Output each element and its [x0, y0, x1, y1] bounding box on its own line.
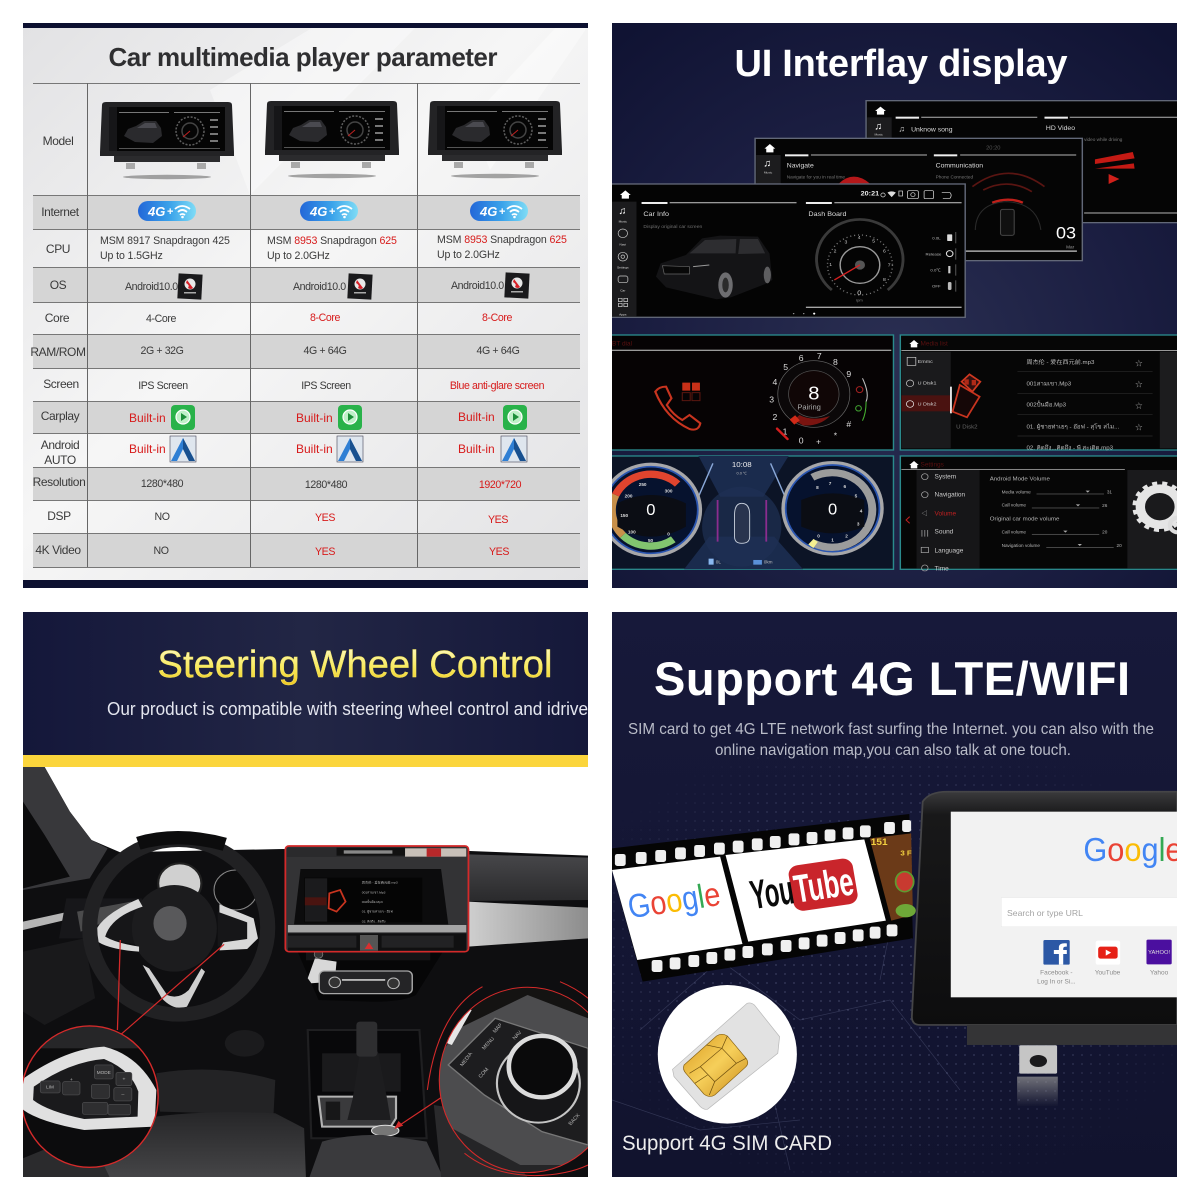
- gauge: tachometer: 5: [855, 493, 858, 498]
- CPU row: Up to 1.5GHz: [100, 250, 163, 262]
- row labels: CPU: [46, 242, 70, 256]
- panel: steering wheel control: [21, 612, 618, 1177]
- gauge: tachometer: 6: [844, 484, 847, 489]
- core row: 8-Core: [310, 312, 340, 324]
- stacked UI screens: [611, 101, 1183, 317]
- screen: navigate and communication: Music: [764, 170, 773, 174]
- gauge: speed: 300: [665, 488, 673, 493]
- screen: car info and dash board: Apps: [619, 312, 627, 316]
- screen: navigate and communication: 20:20: [986, 145, 1001, 151]
- OS row: Android10.0: [451, 280, 504, 292]
- DSP row: YES: [488, 514, 508, 526]
- screen: car info and dash board: Car Info: [643, 211, 669, 218]
- screen: media list: 001สามเขา.Mp3: [1026, 381, 1072, 387]
- DSP row: YES: [315, 512, 335, 524]
- rpm gauge: 0: [857, 290, 861, 297]
- heading: support title: Support 4G LTE/WIFI: [654, 652, 1130, 705]
- internet badges: 4G: [309, 204, 327, 219]
- gauge: tachometer: 8: [816, 485, 819, 490]
- screen: BT dial: Pairing: [797, 403, 821, 411]
- screen: instrument cluster: 10:08: [732, 460, 752, 469]
- screen: settings: Call volume: [1002, 503, 1027, 508]
- carplay row: [129, 405, 527, 430]
- RAM row: 4G + 64G: [476, 345, 520, 357]
- gauge: tachometer: 1: [831, 537, 834, 542]
- gauge: speed: 250: [639, 482, 647, 487]
- shortcut: YouTube: YouTube: [1095, 970, 1121, 977]
- callout arrows: [117, 940, 441, 1128]
- screen: media list: Media list: [921, 341, 948, 348]
- rpm gauge: 5: [872, 239, 875, 245]
- gauge: tachometer: 0: [817, 534, 820, 539]
- gauge: tachometer: 7: [829, 481, 832, 486]
- screen: car info and dash board: Car: [620, 289, 625, 293]
- gauge: tachometer: [781, 461, 884, 556]
- gauge: speed: 150: [620, 513, 629, 518]
- screen: settings: 20: [1117, 543, 1122, 548]
- shortcut: Facebook: Log In or Si...: [1037, 979, 1076, 985]
- screen: instrument cluster: [600, 456, 893, 569]
- zoom box: head unit screen: 001สามเขา.Mp3: [362, 890, 386, 894]
- screen: BT dial: +: [816, 437, 821, 446]
- rpm gauge: 4: [858, 235, 861, 241]
- CPU row: [100, 234, 567, 262]
- screen: car info and dash board: Display original car screen: [643, 224, 703, 230]
- screen: car info and dash board: Navi: [620, 242, 626, 246]
- search bar: Search or type URL: [1007, 908, 1083, 918]
- caption: SIM card: Support 4G SIM CARD: [622, 1132, 832, 1155]
- screen row: Blue anti-glare screen: [450, 380, 545, 392]
- callout circle: idrive knob: MAP: [492, 1022, 505, 1035]
- screen: navigate and communication: Navigate: [787, 163, 814, 170]
- screen: BT dial: 9: [846, 369, 852, 379]
- callout circle: idrive knob: BACK: [568, 1112, 582, 1127]
- core row: [146, 314, 512, 322]
- shortcut: Yahoo: YAHOO!: [1148, 950, 1171, 956]
- vehicle status list: Release: [926, 252, 942, 257]
- screen: settings: Settings: [921, 462, 944, 468]
- callout circle: idrive knob: MENU: [481, 1036, 496, 1051]
- screen: BT dial: 3: [769, 395, 774, 405]
- resolution row: 1920*720: [479, 479, 522, 491]
- film logo: YouTube: Tube: [791, 859, 857, 911]
- shortcut: Yahoo: Yahoo: [1150, 970, 1169, 977]
- screen: media list: U Disk1: [918, 381, 937, 387]
- internet badges: +: [499, 206, 505, 218]
- row labels: Internet: [41, 205, 80, 219]
- row labels: Carplay: [41, 409, 80, 423]
- screen: music and video: ♫: [874, 122, 882, 132]
- rpm gauge: 3: [844, 239, 848, 245]
- row labels: OS: [50, 278, 67, 292]
- RAM row: 2G + 32G: [140, 345, 184, 357]
- row labels: DSP: [47, 509, 71, 523]
- gauge: speed: 0: [646, 502, 656, 519]
- vehicle status list: OFF: [932, 284, 941, 289]
- row labels: RAM/ROM: [30, 345, 86, 359]
- film strip: 3 F: [900, 849, 912, 858]
- screen: music and video: Unknow song: [911, 127, 953, 134]
- 4K video row: YES: [489, 546, 509, 558]
- screen: settings: Navigation volume: [1002, 543, 1041, 548]
- screen: music and video: ♫: [899, 124, 905, 134]
- screen: settings: 26: [1102, 503, 1108, 508]
- screen: media list: ☆: [1135, 424, 1143, 431]
- screen: car info and dash board: 20:21: [861, 191, 879, 198]
- perforations: [615, 820, 911, 972]
- film strip: 151: [871, 837, 888, 848]
- CPU row: Up to 2.0GHz: [267, 250, 330, 262]
- screen: media list: ☆: [1135, 381, 1143, 389]
- screen: media list: ☆: [1135, 402, 1143, 410]
- screen: settings: Android Mode Volume: [990, 477, 1051, 483]
- screen: instrument cluster: 0L: [716, 560, 722, 565]
- heading: UI title: UI Interflay display: [734, 43, 1068, 85]
- screen: media list: U Disk2: [956, 425, 978, 431]
- gauge: speed: 50: [648, 538, 654, 543]
- internet badges: +: [329, 206, 335, 218]
- callout circle: idrive knob: [427, 982, 618, 1177]
- model images: [100, 101, 562, 179]
- resolution row: [142, 480, 522, 488]
- zoom box: head unit screen: [285, 846, 468, 952]
- shortcut: Yahoo: [1146, 940, 1172, 977]
- row labels: [30, 134, 86, 557]
- steering wheel: [90, 838, 268, 1015]
- gauge: tachometer: 3: [857, 522, 860, 527]
- screen: settings: 31: [1107, 489, 1113, 494]
- screen: BT dial: 6: [799, 353, 804, 363]
- internet badges: 4G: [147, 204, 165, 219]
- OS row: Android10.0: [293, 281, 346, 293]
- DSP row: [155, 512, 508, 523]
- parameter table: [30, 83, 580, 568]
- description: online navigation map,you can also talk at one touch.: [715, 742, 1071, 759]
- screen: settings: Language: [935, 548, 964, 554]
- screen: BT dial: #: [846, 419, 852, 429]
- icon: home: [620, 190, 631, 199]
- row labels: 4K Video: [35, 543, 81, 557]
- row labels: Resolution: [33, 475, 85, 489]
- UI screens grid: [600, 335, 1186, 573]
- screen: settings: Navigation: [935, 492, 966, 499]
- internet badges: [138, 201, 528, 221]
- screen: BT dial: 8: [808, 383, 819, 404]
- dashboard body: [23, 767, 588, 1177]
- screen: settings: Time: [935, 566, 949, 573]
- rpm gauge: 2: [834, 248, 837, 254]
- screen: navigate and communication: Phone Connected: [936, 175, 974, 180]
- row labels: Screen: [43, 377, 79, 391]
- film logo: Google: Google: [625, 876, 723, 926]
- CPU row: MSM 8917 Snapdragon 425: [100, 235, 230, 247]
- screen: settings: Media volume: [1002, 489, 1031, 494]
- screen: navigate and communication: ♫: [763, 159, 771, 170]
- screen: navigate and communication: 03: [1056, 223, 1076, 242]
- SIM card circle: [658, 985, 797, 1124]
- vehicle status list: 0.0℃: [930, 268, 941, 273]
- internet badges: +: [167, 206, 173, 218]
- callout circle: steering buttons: +: [122, 1077, 125, 1083]
- screen: music and video: Music: [874, 132, 883, 136]
- resolution row: 1280*480: [305, 479, 348, 491]
- search bar: [1001, 898, 1181, 927]
- callout circle: idrive knob: NAV: [512, 1030, 524, 1041]
- vehicle status list: 0.0L: [932, 236, 941, 241]
- zoom box: head unit screen: 02. คิดถึง...คิดถึง: [362, 919, 386, 923]
- screen: settings: [900, 456, 1186, 573]
- screen: BT dial: 2: [772, 412, 778, 422]
- screen: music and video: video while driving: [1084, 137, 1123, 142]
- car image: [656, 236, 772, 299]
- description: SIM card to get 4G LTE network fast surfing the Internet. you can also with the: [628, 721, 1154, 738]
- android auto row: [129, 436, 527, 462]
- callout circle: steering buttons: MODE: [97, 1070, 111, 1075]
- screen: car info and dash board: Settings: [617, 266, 629, 270]
- android auto row: Built-in: [458, 442, 495, 456]
- rpm gauge: rpm: [856, 298, 863, 302]
- gauge: tachometer: 4: [860, 508, 863, 513]
- callout circle: idrive knob: COM: [478, 1067, 490, 1080]
- OS row: [125, 272, 530, 300]
- shortcut: Facebook: Facebook -: [1040, 970, 1073, 977]
- screen: BT dial: 1: [783, 427, 788, 436]
- panel: car multimedia player parameter: [23, 23, 590, 588]
- vehicle status list: [926, 232, 956, 292]
- film strip: [612, 814, 916, 982]
- screen: media list: Emmc: [918, 359, 933, 365]
- screen: BT dial: 4: [772, 377, 778, 387]
- screen: settings: Original car mode volume: [990, 517, 1060, 523]
- gauge: speed: [612, 462, 702, 558]
- screen: media list: U Disk2: [918, 401, 937, 407]
- screen: car info and dash board: Dash Board: [808, 211, 847, 218]
- screen: settings: System: [935, 474, 956, 480]
- screen: settings: Call volume: [1002, 529, 1027, 534]
- heading: steering title: Steering Wheel Control: [158, 644, 552, 686]
- SIM chip: [683, 1034, 748, 1096]
- OS row: Android10.0: [125, 281, 178, 293]
- screen row: IPS Screen: [138, 380, 188, 392]
- 4K video row: [154, 546, 509, 555]
- screen: settings: Volume: [935, 511, 957, 517]
- row labels: AUTO: [44, 453, 76, 467]
- screen: navigate and communication: Mar: [1066, 245, 1075, 250]
- interior photo: [21, 767, 618, 1177]
- CPU row: MSM 8953 Snapdragon 625: [437, 234, 567, 246]
- browser logo: Google: Google: [1083, 832, 1183, 869]
- yellow band: [23, 755, 588, 767]
- callout circle: steering buttons: –: [121, 1092, 124, 1098]
- zoom box: head unit screen: 002ปั้นมือ.Mp3: [362, 899, 383, 904]
- CPU row: Up to 2.0GHz: [437, 249, 500, 261]
- screen: car info and dash board: Music: [619, 219, 627, 223]
- screen: BT dial: *: [834, 431, 838, 441]
- callout circle: steering buttons: [21, 1025, 165, 1168]
- seats: [23, 1030, 528, 1177]
- screen: BT dial: 5: [783, 362, 788, 372]
- screen: instrument cluster: 0km: [764, 560, 773, 565]
- DSP row: NO: [154, 511, 170, 523]
- status icons: [881, 191, 951, 199]
- gauge: speed: 200: [625, 493, 633, 498]
- screen: settings: 20: [1102, 529, 1108, 534]
- screen: media list: 周杰伦 - 爱在西元前.mp3: [1026, 358, 1095, 366]
- screen: media list: ☆: [1135, 360, 1143, 367]
- description: [628, 721, 1154, 759]
- screen: media list: [900, 335, 1183, 451]
- screen: car info and dash board: [611, 184, 965, 317]
- core row: 4-Core: [146, 313, 176, 325]
- resolution row: 1280*480: [141, 478, 184, 490]
- callout circle: steering buttons: +: [70, 1077, 73, 1083]
- screen: media list: 002ปั้นมือ.Mp3: [1026, 399, 1067, 409]
- screen: media list: 02. คิดถึง...คิดถึง - พี สะเดิด.mp3: [1026, 444, 1114, 451]
- rpm gauge: [817, 219, 903, 302]
- row labels: Model: [43, 134, 73, 148]
- screen row: [139, 381, 544, 392]
- core row: 8-Core: [482, 312, 512, 324]
- carplay row: Built-in: [458, 410, 495, 424]
- carplay row: Built-in: [129, 411, 166, 425]
- RAM row: 4G + 64G: [303, 345, 347, 357]
- callout circle: idrive knob: MEDIA: [459, 1051, 474, 1068]
- callout circle: steering buttons: LIM: [46, 1084, 54, 1089]
- heading: table title: Car multimedia player parameter: [108, 42, 498, 72]
- film logo: YouTube: You: [747, 867, 797, 918]
- carplay row: Built-in: [296, 411, 333, 425]
- gauge: speed: 100: [628, 529, 636, 534]
- screen: BT dial: 0: [799, 436, 804, 445]
- row labels: Android: [41, 438, 79, 452]
- screen: navigate and communication: [755, 138, 1082, 261]
- rpm gauge: 8: [883, 277, 886, 283]
- screen: settings: Sound: [935, 529, 954, 536]
- screen: car info and dash board: ♫: [618, 206, 627, 217]
- screen: BT dial: 7: [817, 351, 822, 361]
- zoom box: head unit screen: 周杰伦 - 爱在西元前.mp3: [362, 880, 398, 885]
- screen: BT dial: 8: [833, 357, 838, 367]
- 4K video row: NO: [153, 545, 169, 557]
- rpm gauge: 6: [883, 248, 886, 254]
- shortcut: Facebook: [1037, 940, 1076, 985]
- rpm gauge: 1: [829, 262, 832, 268]
- rpm gauge: 7: [888, 263, 891, 269]
- screen: BT dial: [611, 335, 893, 450]
- screen: music and video: [866, 101, 1183, 223]
- row labels: Core: [45, 311, 70, 325]
- screen row: IPS Screen: [301, 380, 351, 392]
- shortcut: YouTube: [1095, 941, 1121, 977]
- globe pattern background: [560, 720, 1200, 1200]
- screen: navigate and communication: Communication: [936, 163, 983, 170]
- android auto row: Built-in: [129, 442, 166, 456]
- gauge: tachometer: 0: [828, 502, 837, 518]
- screen: music and video: HD Video: [1046, 125, 1075, 132]
- zoom box: head unit screen: 01. ผู้ชายท่าเยๆ - อ๊อฟ: [362, 909, 393, 915]
- screen: settings: ◁: [921, 511, 928, 517]
- subtitle: Our product is compatible with steering wheel control and idrive: [107, 699, 588, 719]
- gauge: tachometer: 2: [845, 533, 848, 538]
- screen: navigate and communication: Navigate for you in real time: [787, 175, 845, 180]
- car outline: [735, 503, 750, 543]
- center console: [297, 950, 443, 1177]
- gauge: speed: 0: [667, 532, 670, 537]
- panel: UI interflay display: [600, 23, 1186, 588]
- panel: support 4G LTE/WIFI: [560, 612, 1200, 1200]
- screen: media list: 01. ผู้ชายท่าเยๆ - อ๊อฟ - สุโข สไม...: [1026, 423, 1120, 430]
- screen: instrument cluster: 0.0 ℃: [736, 471, 747, 475]
- android auto row: Built-in: [296, 442, 333, 456]
- internet badges: 4G: [479, 204, 497, 219]
- CPU row: MSM 8953 Snapdragon 625: [267, 235, 397, 247]
- RAM row: [141, 346, 520, 354]
- screen: BT dial: BT dial: [612, 341, 632, 348]
- 4K video row: YES: [315, 546, 335, 558]
- device: [912, 792, 1183, 1107]
